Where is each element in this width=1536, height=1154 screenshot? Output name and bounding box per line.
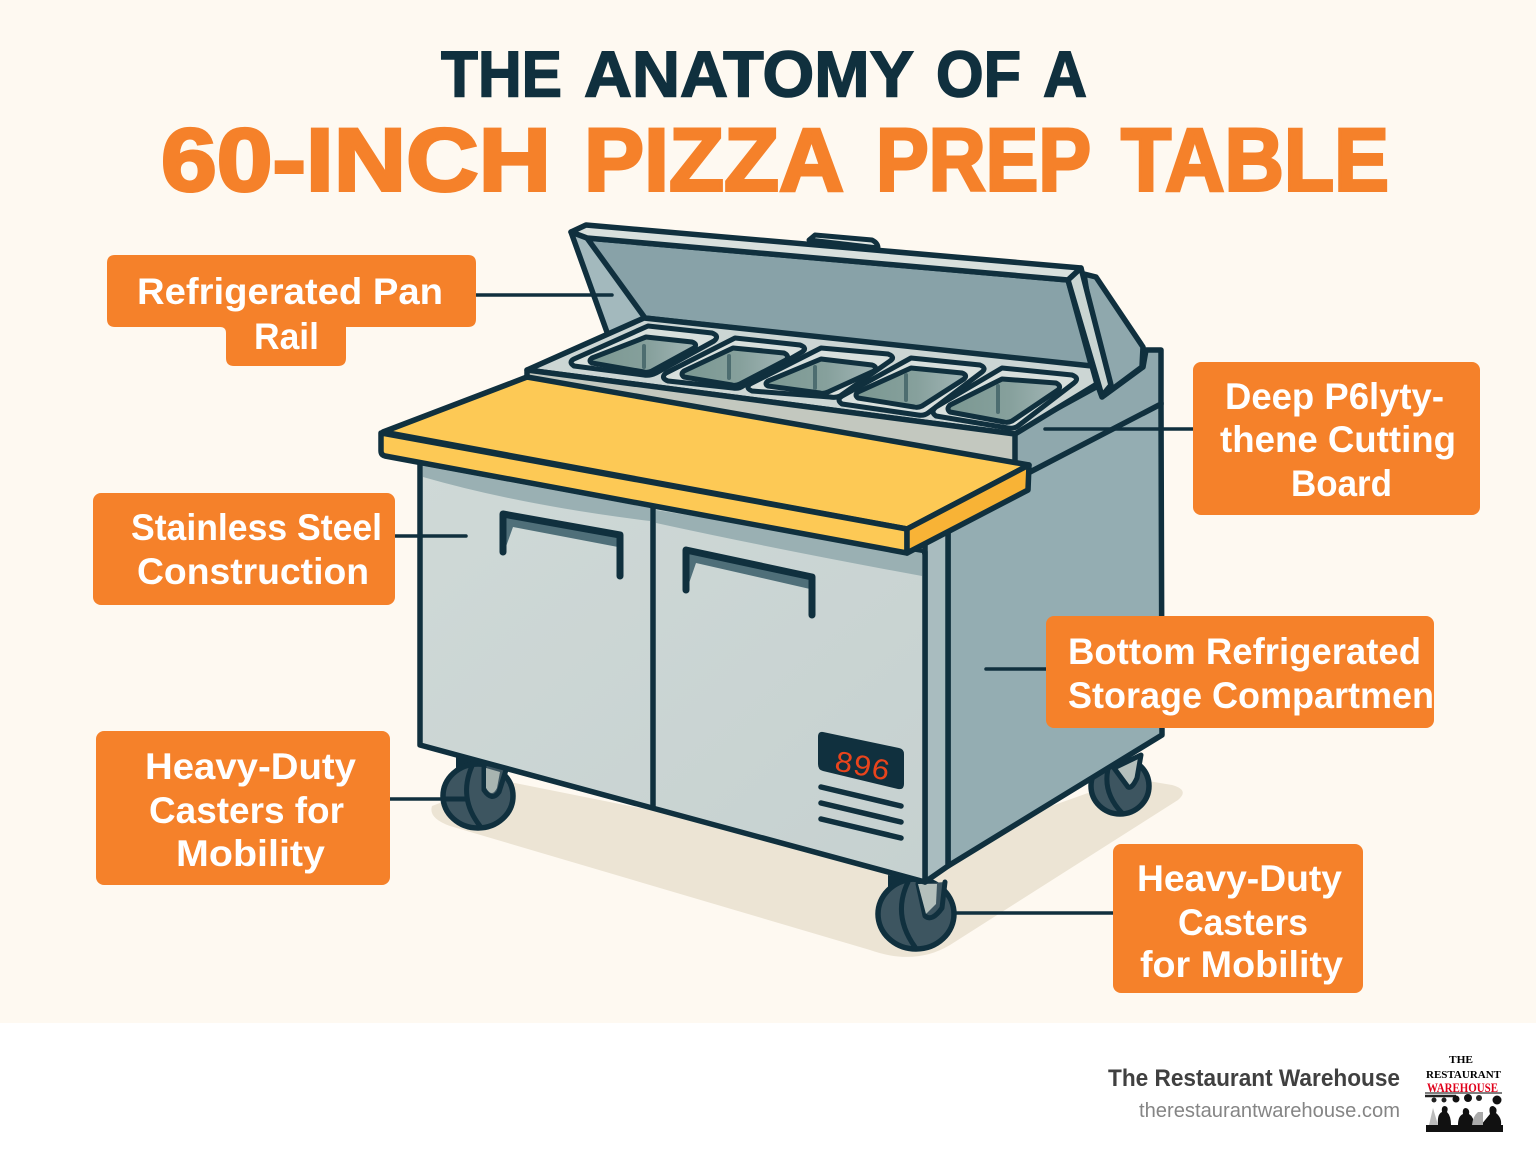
raised lid: [571, 225, 1143, 396]
pan 5: [933, 368, 1077, 428]
pan 2: [663, 338, 805, 388]
brand logo: WAREHOUSE: [1427, 1080, 1498, 1095]
vent slots: [821, 787, 901, 838]
display readout: 896: [831, 746, 893, 791]
footer brand: [1108, 1065, 1400, 1122]
label: heavy-duty casters right: for Mobility: [1140, 944, 1343, 985]
title line two: 60-INCH: [161, 110, 551, 210]
caster: front right: [878, 875, 954, 949]
title line one: OF: [936, 38, 1021, 110]
front corner strip: [925, 526, 948, 882]
handle: left door: [503, 512, 620, 576]
board top surface: [383, 377, 1029, 529]
lid hinge right side: [1084, 274, 1143, 396]
lid inner face: [587, 238, 1092, 368]
label: refrigerated pan rail: Refrigerated Pan: [137, 271, 443, 312]
rail top surface: [527, 318, 1097, 434]
rail front lip: [527, 370, 1015, 464]
brand logo: [1425, 1054, 1503, 1132]
front doors: [420, 462, 925, 882]
title line two: [161, 110, 1389, 210]
band under the cutting board, second door: [656, 510, 922, 576]
pan 1: [571, 326, 717, 375]
brand url: therestaurantwarehouse.com: [1139, 1100, 1400, 1122]
title line two: TABLE: [1121, 110, 1389, 210]
label: cutting board: Deep P6lyty-: [1225, 376, 1444, 417]
digital display: [818, 732, 904, 791]
label: heavy-duty casters right: Casters: [1178, 902, 1308, 943]
band under the cutting board: [423, 466, 650, 521]
label: bottom refrigerated storage: Storage Compartmen: [1068, 675, 1434, 716]
title: [161, 38, 1389, 210]
label: bottom refrigerated storage: [1046, 616, 1434, 728]
label: heavy-duty casters right: [1113, 844, 1363, 993]
label: stainless steel construction: [93, 493, 395, 605]
label: stainless steel construction: Stainless Steel: [131, 507, 382, 548]
label: refrigerated pan rail: [107, 255, 476, 366]
pan 4: [839, 358, 984, 415]
handle: right door: [686, 549, 812, 615]
board end face: [907, 465, 1029, 553]
right side panel: [948, 403, 1162, 866]
pan 3: [748, 348, 893, 397]
label: heavy-duty casters left: Heavy-Duty: [145, 746, 356, 787]
label: cutting board: [1193, 362, 1480, 515]
door seam: [650, 506, 656, 807]
brand logo: RESTAURANT: [1426, 1069, 1502, 1081]
label: heavy-duty casters right: Heavy-Duty: [1137, 858, 1342, 899]
lid left side triangle: [571, 232, 646, 335]
label: heavy-duty casters left: [96, 731, 390, 885]
label: heavy-duty casters left: Casters for: [149, 790, 344, 831]
label: refrigerated pan rail: Rail: [254, 316, 319, 357]
title line two: PIZZA: [584, 110, 844, 210]
brand name: The Restaurant Warehouse: [1108, 1065, 1400, 1092]
title line one: [441, 38, 1087, 110]
lid right edge: [1068, 268, 1111, 396]
lid top rim: [571, 225, 1081, 280]
label: heavy-duty casters left: Mobility: [176, 833, 325, 874]
label: stainless steel construction: Construction: [137, 551, 369, 592]
cutting board: [381, 377, 1029, 553]
label: cutting board: thene Cutting: [1220, 419, 1456, 460]
title line one: A: [1043, 38, 1087, 110]
brand logo: THE: [1449, 1054, 1473, 1066]
lid handle: [809, 235, 878, 248]
caster: back right: [1091, 755, 1149, 814]
leader lines: [390, 295, 1193, 913]
floor shadow: [431, 778, 1183, 957]
prep table illustration: [381, 225, 1162, 949]
title line one: THE: [441, 38, 562, 110]
label: bottom refrigerated storage: Bottom Refrigerated: [1068, 631, 1421, 672]
door panel: [420, 462, 925, 882]
pan rail: [527, 318, 1097, 464]
label: cutting board: Board: [1291, 463, 1392, 504]
title line one: ANATOMY: [584, 38, 914, 110]
board front face: [381, 433, 907, 553]
side top surface: [1014, 350, 1161, 472]
title line two: PREP: [876, 110, 1091, 210]
caster: front left: [443, 756, 513, 828]
